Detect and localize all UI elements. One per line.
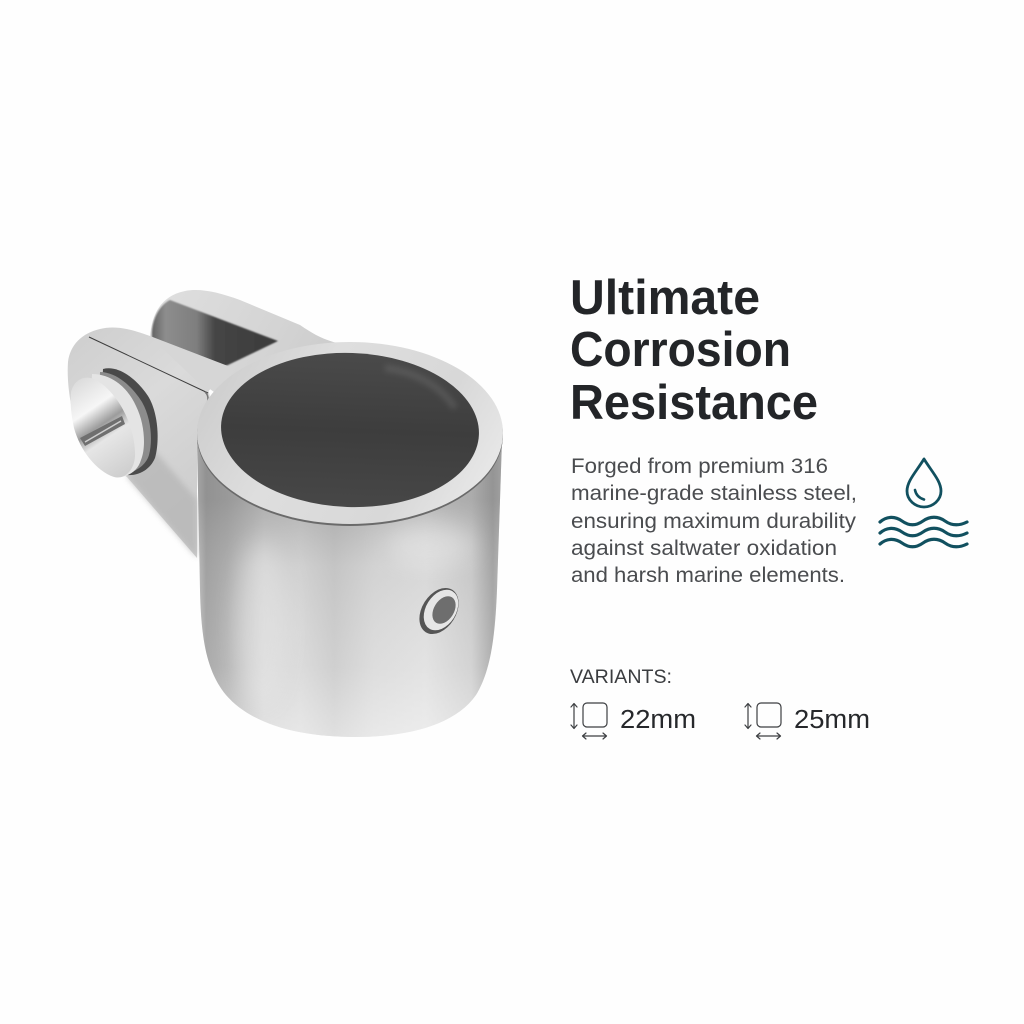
description text: against saltwater oxidation — [571, 536, 837, 560]
dark inner bore — [218, 349, 482, 511]
icon: water drop over waves — [880, 459, 967, 547]
description text — [571, 454, 857, 587]
heading: Corrosion — [570, 323, 791, 377]
slotted screw and washer — [71, 368, 158, 477]
description text: and harsh marine elements. — [571, 563, 845, 587]
heading: Ultimate — [570, 271, 760, 325]
top rim ring — [197, 342, 503, 526]
variant: 22mm — [571, 703, 696, 739]
variants label: VARIANTS: — [570, 666, 672, 688]
description text: ensuring maximum durability — [571, 509, 856, 533]
hex set screw — [411, 581, 467, 641]
product photo: stainless steel jaw slide fitting — [68, 290, 503, 737]
cylinder body — [197, 440, 502, 737]
variant: 25mm: 25mm — [794, 706, 870, 734]
variant: 22mm: 22mm — [620, 706, 696, 734]
icon: size square 25mm — [745, 703, 781, 739]
rear jaw tab with slot — [150, 290, 345, 400]
description text: Forged from premium 316 — [571, 454, 828, 478]
variant: 25mm — [745, 703, 870, 739]
front jaw plate — [68, 327, 228, 558]
description text: marine-grade stainless steel, — [571, 481, 857, 505]
heading: Resistance — [570, 376, 818, 430]
heading — [570, 271, 818, 430]
icon: size square 22mm — [571, 703, 607, 739]
